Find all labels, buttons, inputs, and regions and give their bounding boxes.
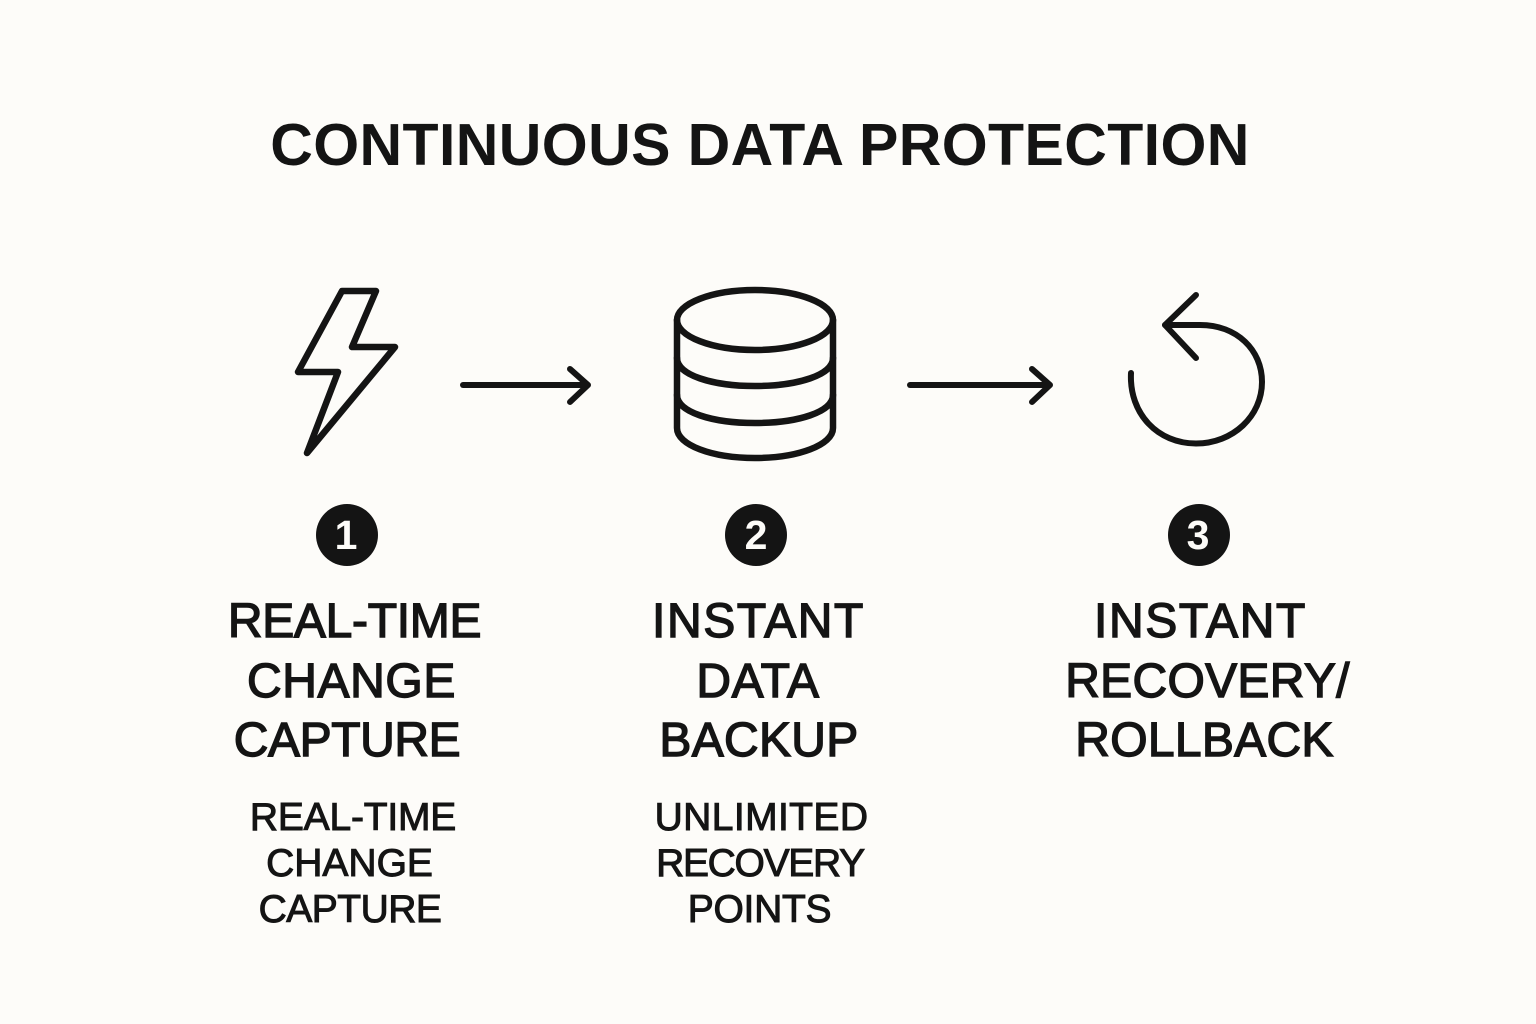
- step 2 heading: DATA: [696, 655, 820, 708]
- step 2 description: POINTS: [688, 888, 831, 931]
- badge 1: 1: [335, 512, 357, 558]
- badge 3: 3: [1187, 512, 1209, 558]
- step 2 heading: INSTANT: [652, 595, 865, 648]
- step 2 description: UNLIMITED: [655, 796, 868, 839]
- badge 2: 2: [745, 512, 767, 558]
- badge 1: [316, 504, 378, 566]
- step 3 heading: RECOVERY/: [1065, 655, 1350, 708]
- icon: rollback arrow: [1131, 295, 1262, 444]
- step 3 heading: INSTANT: [1094, 595, 1307, 648]
- icon: lightning bolt: [298, 291, 395, 453]
- step 2 heading: [652, 595, 865, 767]
- step 1 heading: REAL-TIME: [228, 595, 481, 648]
- step 1 description: [250, 796, 456, 931]
- arrow: step 1 to step 2: [463, 369, 588, 402]
- step 1 description: REAL-TIME: [250, 796, 456, 839]
- arrow: step 2 to step 3: [910, 369, 1050, 402]
- title: CONTINUOUS DATA PROTECTION: [270, 112, 1250, 178]
- badge 3: [1168, 504, 1230, 566]
- step 2 heading: BACKUP: [659, 714, 859, 767]
- step 1 heading: CHANGE: [247, 655, 456, 708]
- step 1 heading: CAPTURE: [234, 714, 460, 767]
- step 3 heading: [1065, 595, 1350, 767]
- step 2 description: RECOVERY: [656, 842, 864, 885]
- step 1 description: CHANGE: [266, 842, 433, 885]
- badge 2: [725, 504, 787, 566]
- step 2 description: [655, 796, 868, 931]
- icon: database: [677, 290, 833, 458]
- step 3 heading: ROLLBACK: [1075, 714, 1334, 767]
- step 1 description: CAPTURE: [259, 888, 441, 931]
- step 1 heading: [228, 595, 481, 767]
